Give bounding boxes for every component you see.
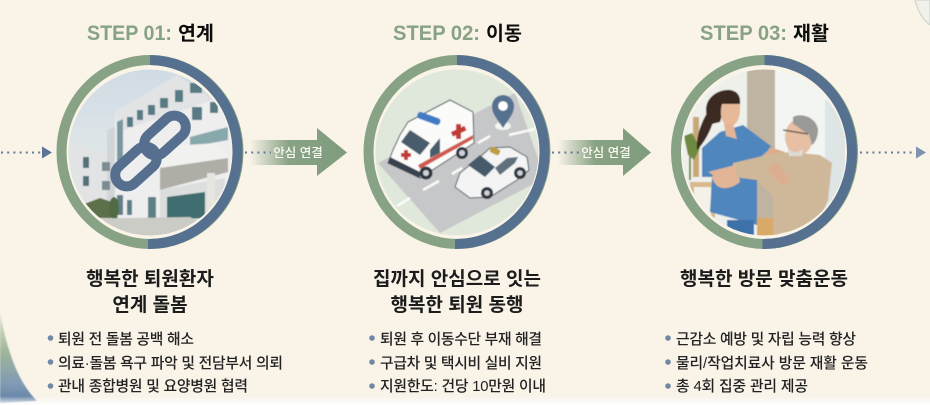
decorative leaf: bottom left corner	[0, 312, 37, 403]
step 3 bullet list: 총 4회 집중 관리 제공	[676, 378, 808, 395]
step 3 photo: therapist and senior patient	[683, 70, 846, 236]
step 1 bullet list: 의료·돌봄 욕구 파악 및 전담부서 의뢰	[58, 355, 283, 372]
step 1 photo: hospital building	[68, 70, 232, 236]
step 3 bullet list: 근감소 예방 및 자립 능력 향상	[676, 331, 856, 348]
step 2 illustration: road with vehicles	[376, 70, 538, 236]
step 1 heading	[86, 268, 214, 316]
step 1 ring	[62, 60, 238, 244]
ambulance	[388, 100, 474, 180]
step 2 bullet list	[369, 331, 546, 395]
connector: step 1 to step 2	[245, 128, 347, 176]
nurse	[697, 90, 785, 238]
step 1 bullet list: 퇴원 전 돌봄 공백 해소	[58, 331, 194, 348]
step 1 bullet list	[48, 331, 283, 395]
step 3 column	[665, 21, 868, 395]
step 2 title: 이동	[486, 23, 522, 45]
step 2 bullet list: 지원한도: 건당 10만원 이내	[380, 378, 546, 395]
step 3 heading: 행복한 방문 맞춤운동	[680, 268, 848, 290]
senior patient	[708, 115, 832, 235]
arrow 1	[250, 128, 347, 176]
step 2 title: STEP 02:	[393, 21, 480, 45]
step 1 title: STEP 01:	[87, 21, 172, 45]
dotted connector: leaving step 3	[860, 146, 926, 158]
step 2 heading	[373, 268, 541, 316]
step 2 bullet list: 구급차 및 택시비 실비 지원	[380, 355, 542, 372]
step 3 ring	[676, 60, 853, 244]
decorative arc: top right corner	[915, 0, 930, 25]
connector: step 2 to step 3	[552, 128, 651, 176]
step 1 heading: 행복한 퇴원환자	[86, 268, 214, 290]
arrow 1 dots	[245, 152, 271, 154]
arrow 1 label: 안심 연결	[273, 146, 323, 160]
step 2 bullet list: 퇴원 후 이동수단 부재 해결	[380, 331, 542, 348]
taxi	[455, 146, 529, 199]
step 3 bullet list: 물리/작업치료사 방문 재활 운동	[676, 355, 868, 372]
arrow 2	[558, 128, 651, 176]
step 2 column	[368, 21, 546, 395]
step 1 heading: 연계 돌봄	[112, 294, 188, 316]
arrow 2 label: 안심 연결	[581, 146, 631, 160]
step 1 column	[48, 21, 283, 395]
step 2 ring	[368, 60, 546, 244]
arrow 2 dots	[552, 152, 580, 154]
icon: chain link	[110, 111, 191, 191]
dotted connector: entering step 1	[1, 146, 52, 158]
step 2 heading: 집까지 안심으로 잇는	[373, 268, 541, 290]
step 1 title: 연계	[178, 23, 214, 45]
step 1 bullet list: 관내 종합병원 및 요양병원 협력	[58, 378, 248, 395]
location pin	[492, 95, 514, 130]
step 2 heading: 행복한 퇴원 동행	[391, 294, 523, 316]
step 3 title: STEP 03:	[700, 21, 787, 45]
step 3 bullet list	[665, 331, 868, 395]
step 3 title: 재활	[793, 23, 829, 45]
